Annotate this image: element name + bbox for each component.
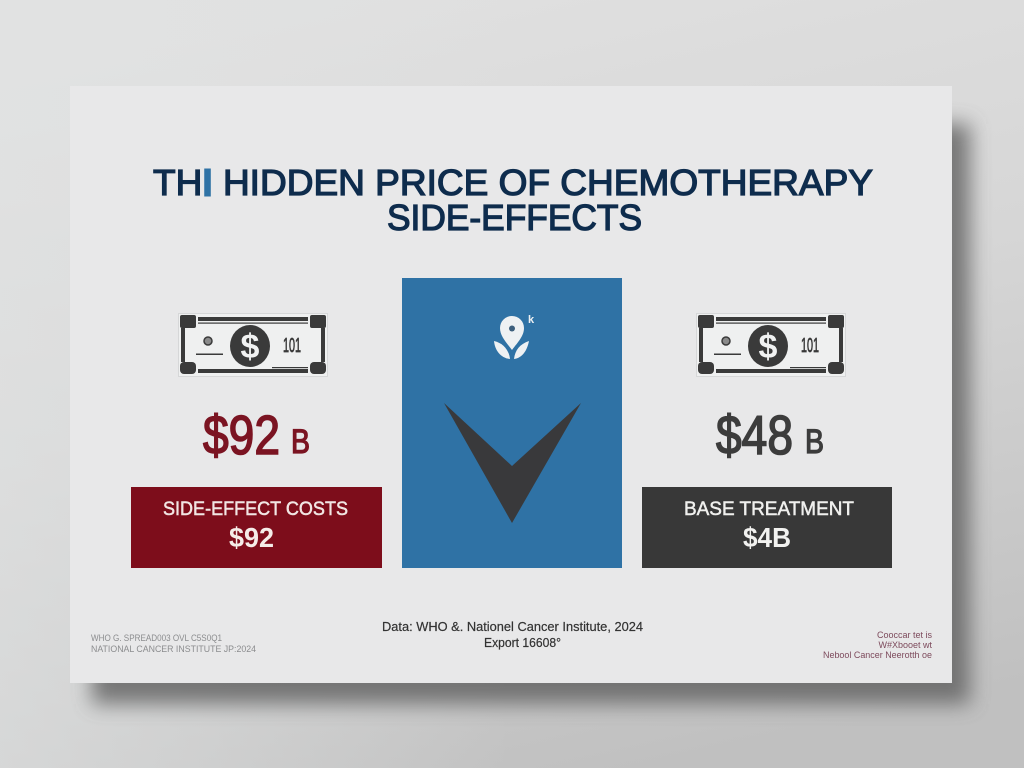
panel: center blue bbox=[402, 278, 622, 568]
label box: side-effect costs: $92 bbox=[229, 522, 274, 553]
amount: $48 B: $48 bbox=[716, 404, 793, 466]
label box: base treatment bbox=[642, 487, 892, 568]
icon: dollar bill left: 101 bbox=[283, 335, 301, 357]
footer: source note: Export 16608° bbox=[484, 635, 561, 650]
footer: right credit: Cooccar tet is bbox=[877, 630, 932, 640]
icon: dollar bill right: $ bbox=[759, 328, 778, 366]
icon: pin flower: k bbox=[528, 314, 535, 326]
icon: pin flower bbox=[494, 314, 535, 359]
footer: source note bbox=[382, 619, 643, 650]
footer: left credit: WHO G. SPREAD003 OVL C5S0Q1 bbox=[91, 633, 222, 643]
icon: dollar bill right: 101 bbox=[801, 335, 819, 357]
title: SIDE-EFFECTS bbox=[387, 197, 642, 238]
label box: side-effect costs bbox=[131, 487, 382, 568]
main panel bbox=[70, 86, 952, 683]
title bbox=[153, 162, 873, 238]
icon: dollar bill left: $ bbox=[241, 328, 260, 366]
label box: base treatment: $4B bbox=[743, 522, 791, 553]
footer: source note: Data: WHO &. Nationel Cancer Institute, 2024 bbox=[382, 619, 643, 634]
label box: base treatment: BASE TREATMENT bbox=[684, 499, 854, 520]
footer: right credit: Nebool Cancer Neerotth oe bbox=[823, 650, 932, 660]
chevron bbox=[444, 403, 581, 523]
title: THI HIDDEN PRICE OF CHEMOTHERAPY bbox=[153, 162, 873, 203]
footer: left credit bbox=[91, 633, 256, 654]
amount: $92 B: B bbox=[291, 423, 310, 461]
amount: $48 B: B bbox=[805, 423, 824, 461]
amount: $92 B: $92 bbox=[203, 404, 280, 466]
panel: base treatment bbox=[642, 314, 892, 568]
label box: side-effect costs: SIDE-EFFECT COSTS bbox=[163, 499, 348, 520]
icon: dollar bill right bbox=[696, 314, 846, 376]
footer: left credit: NATIONAL CANCER INSTITUTE JP:2024 bbox=[91, 644, 256, 654]
footer: right credit: W#Xbooet wt bbox=[878, 640, 932, 650]
panel: side-effect costs bbox=[131, 314, 382, 568]
icon: dollar bill left bbox=[178, 314, 328, 376]
panel shadow bbox=[92, 124, 970, 704]
footer: right credit bbox=[823, 630, 932, 660]
